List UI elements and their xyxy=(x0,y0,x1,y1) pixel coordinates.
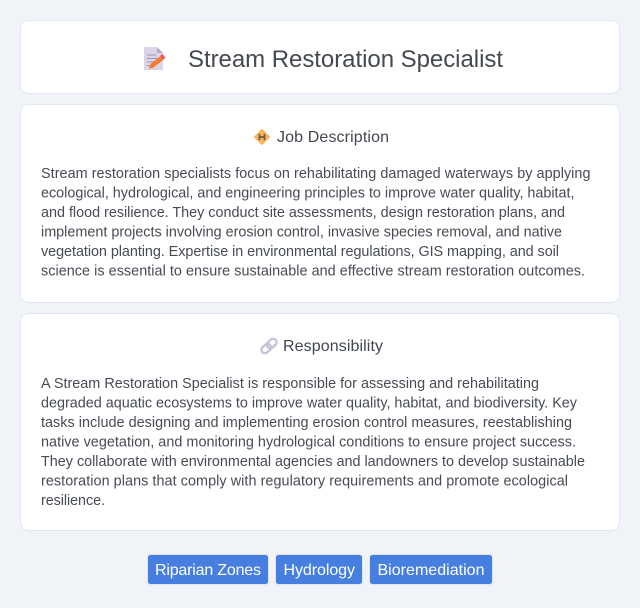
tag: hydrology: Hydrology xyxy=(284,562,355,579)
text block: job description: and flood resilience. They conduct site assessments, design restoration plans, and xyxy=(41,205,565,221)
text block: job description: implement projects involving erosion control, invasive species removal, and native xyxy=(41,224,562,240)
text block: job description: ecological, hydrological, and engineering principles to improve water quality, habitat, xyxy=(41,186,574,202)
text block: responsibility: They collaborate with environmental agencies and landowners to develop sustainable xyxy=(41,454,585,470)
tag: riparian zones: Riparian Zones xyxy=(155,562,261,579)
text block: responsibility: tasks include designing and implementing erosion control measures, reestablishing xyxy=(41,415,572,431)
title: Stream Restoration Specialist xyxy=(188,46,503,73)
text block: responsibility: native vegetation, and monitoring hydrological conditions to ensure project success. xyxy=(41,434,576,450)
tag: bioremediation xyxy=(370,554,492,584)
panel: title card xyxy=(20,20,620,94)
text block: job description: vegetation planting. Expertise in environmental regulations, GIS mapping, and soil xyxy=(41,244,559,260)
panel: job description xyxy=(20,104,620,302)
icon: chain link xyxy=(260,337,278,355)
panel: responsibility xyxy=(20,314,620,530)
text block: responsibility: restoration plans that comply with regulatory requirements and promote ecological xyxy=(41,474,568,490)
text block: job description xyxy=(41,166,590,280)
tag: riparian zones xyxy=(148,554,268,584)
heading: responsibility: Responsibility xyxy=(283,338,383,355)
heading: job description: Job Description xyxy=(277,129,389,146)
tag: hydrology xyxy=(276,554,362,584)
text block: responsibility: degraded aquatic ecosystems to improve water quality, habitat, and biodiversity. Key xyxy=(41,396,578,412)
icon: diamond sign xyxy=(254,130,270,144)
text block: responsibility xyxy=(41,376,585,509)
text block: job description: Stream restoration specialists focus on rehabilitating damaged waterways by applying xyxy=(41,166,590,182)
tag: bioremediation: Bioremediation xyxy=(378,562,484,579)
text block: responsibility: resilience. xyxy=(41,493,105,509)
text block: job description: science is essential to ensure sustainable and effective stream restoration outcomes. xyxy=(41,264,585,280)
icon: document with pencil xyxy=(144,47,166,70)
text block: responsibility: A Stream Restoration Specialist is responsible for assessing and rehabilitating xyxy=(41,376,539,392)
